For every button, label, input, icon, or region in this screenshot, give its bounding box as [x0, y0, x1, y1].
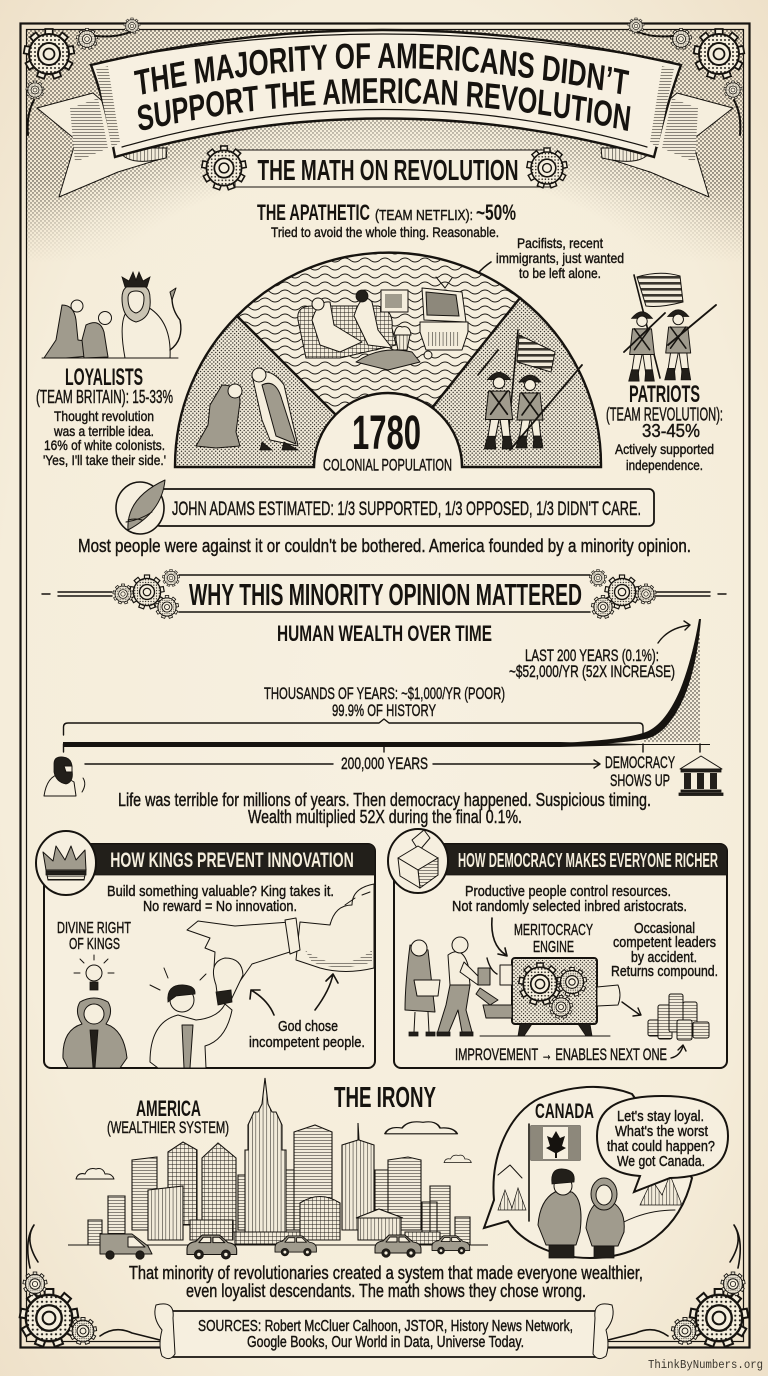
crown badge	[36, 831, 96, 895]
icon: quill	[128, 480, 165, 530]
panel: how democracy makes everyone richer: Returns compound.	[611, 963, 718, 980]
apathetic heading: THE APATHETIC	[257, 200, 370, 225]
halftone vignette	[27, 30, 743, 258]
icon: man in parka	[538, 1169, 581, 1258]
last 200 years label: LAST 200 YEARS (0.1%):	[525, 646, 659, 665]
panel: how kings prevent innovation: DIVINE RIGHT	[57, 920, 131, 937]
speech bubble	[597, 1096, 728, 1192]
panel: how kings prevent innovation: No reward = No innovation.	[143, 898, 297, 915]
speech bubble: What's the worst	[615, 1123, 709, 1140]
thousands of years label: 99.9% OF HISTORY	[332, 701, 436, 720]
patriots text	[606, 381, 723, 473]
thousands of years label	[264, 684, 505, 720]
ballot box badge	[388, 829, 448, 893]
apathetic heading: ~50%	[476, 200, 516, 225]
bracket	[64, 719, 643, 735]
section heading: the math on revolution	[202, 146, 567, 190]
arrows to bulb and king	[250, 974, 338, 1015]
chart: human wealth over time	[63, 619, 710, 752]
lion	[122, 272, 181, 358]
pacifists note with arrow	[466, 235, 624, 289]
illustration: clouds	[76, 1122, 471, 1179]
illustration: america skyline	[68, 1078, 488, 1245]
timing commentary: Life was terrible for millions of years. Then democracy happened. Suspicious timing.	[118, 790, 651, 810]
chart: colonial population semicircle	[175, 253, 601, 474]
canada label: CANADA	[535, 1100, 594, 1123]
icon: distressed scientist	[150, 968, 232, 1068]
icon: small lightbulb	[74, 955, 114, 990]
loyalists text: was a terrible idea.	[53, 423, 154, 439]
loyalists text: LOYALISTS	[65, 364, 143, 391]
last 200 years label: ~$52,000/YR (52X INCREASE)	[509, 662, 675, 681]
shaded area under curve	[640, 619, 700, 742]
kneeling courtiers	[44, 305, 92, 358]
speech bubble: We got Canada.	[617, 1153, 705, 1170]
patriots text: independence.	[626, 457, 703, 473]
timeline arrow: 200,000 years: 200,000 YEARS	[341, 754, 428, 773]
panel: how democracy makes everyone richer: Not randomly selected inbred aristocrats.	[452, 898, 687, 915]
corner gears bottom left	[20, 1225, 160, 1347]
centre label: 1780	[352, 407, 421, 460]
wedge: apathetic	[237, 253, 520, 415]
loyalists text	[36, 364, 173, 468]
icon: large lightbulb	[213, 958, 243, 1005]
sleeping person	[356, 350, 420, 370]
corner gears bottom right	[608, 1225, 748, 1347]
loyalists text: 'Yes, I'll take their side.'	[43, 452, 166, 468]
axis	[63, 742, 710, 747]
timeline arrow: 200,000 years	[85, 754, 600, 773]
apathetic heading: (TEAM NETFLIX):	[375, 207, 473, 224]
title ribbon banner	[36, 28, 734, 198]
wedge: loyalists	[175, 316, 336, 467]
growth curve	[560, 619, 701, 746]
pacifists note with arrow: immigrants, just wanted	[496, 250, 624, 266]
loyalists text: 16% of white colonists.	[44, 437, 165, 453]
pacifists note with arrow: to be left alone.	[519, 265, 601, 281]
panel: how kings prevent innovation: incompetent people.	[249, 1034, 365, 1051]
popcorn	[395, 335, 410, 350]
democracy shows up label: DEMOCRACY	[605, 753, 675, 772]
canada speech circle	[484, 1087, 728, 1258]
title line 2: SUPPORT THE AMERICAN REVOLUTION	[138, 78, 630, 131]
centre label	[314, 393, 462, 474]
pacifists note with arrow: Pacifists, recent	[517, 235, 603, 251]
panel: how kings prevent innovation	[36, 831, 375, 1068]
icon: king's hand taking the bulb	[187, 918, 300, 984]
conclusion text: even loyalist descendants. The math shows they chose wrong.	[186, 1281, 586, 1301]
timing commentary: Wealth multiplied 52X during the final 0.1%.	[248, 807, 522, 827]
panel: how kings prevent innovation: OF KINGS	[69, 936, 120, 953]
icon: greek temple	[679, 756, 723, 796]
icon: meritocracy engine	[480, 958, 620, 1036]
panel: how democracy makes everyone richer: ENGINE	[533, 939, 574, 956]
last 200 years label	[509, 646, 675, 681]
conclusion text	[129, 1263, 643, 1301]
america label: (WEALTHIER SYSTEM)	[107, 1118, 229, 1137]
icon: woman in parka	[586, 1178, 624, 1258]
section heading: why this minority opinion mattered	[42, 570, 726, 618]
centre label: COLONIAL POPULATION	[323, 456, 452, 474]
panel: how kings prevent innovation: Build something valuable? King takes it.	[107, 883, 334, 900]
wedge: patriots	[432, 298, 601, 467]
panel: how democracy makes everyone richer: Occasional	[634, 920, 695, 937]
sources scroll: Google Books, Our World in Data, Universe Today.	[247, 1334, 524, 1351]
icon: loyalists with lion	[42, 272, 181, 358]
loyalists text: (TEAM BRITAIN): 15-33%	[36, 387, 173, 407]
arrow to peak	[658, 621, 690, 643]
callout: john adams estimate	[116, 480, 654, 534]
the irony heading: THE IRONY	[334, 1082, 436, 1114]
patriots text: PATRIOTS	[629, 381, 700, 408]
panel: how kings prevent innovation: KING	[329, 918, 363, 943]
apathetic heading	[257, 200, 516, 225]
patriots text: Actively supported	[615, 441, 714, 457]
illustration: traffic	[100, 1234, 470, 1259]
panel: how democracy makes everyone richer	[388, 829, 727, 1068]
icon: canadian flag	[529, 1124, 580, 1221]
panel: how democracy makes everyone richer: by accident.	[631, 949, 697, 966]
panel: how democracy makes everyone richer: MERITOCRACY	[514, 922, 593, 939]
icon: worried man with hands on head	[63, 998, 127, 1068]
section heading: the math on revolution: THE MATH ON REVOLUTION	[258, 155, 518, 187]
panel: how kings prevent innovation: God chose	[278, 1018, 338, 1035]
sofa and viewers	[298, 306, 396, 358]
corner gears top left	[24, 18, 140, 135]
icon: woman with box	[405, 940, 440, 1036]
arrows around engine	[487, 918, 641, 1016]
panel: how democracy makes everyone richer: Productive people control resources.	[465, 883, 671, 900]
democracy shows up label: SHOWS UP	[610, 771, 670, 790]
america label: AMERICA	[136, 1096, 201, 1121]
televisions	[381, 290, 408, 312]
icon: mountains and trees	[498, 1165, 682, 1230]
loyalists text: Thought revolution	[54, 408, 154, 424]
timing commentary	[118, 790, 651, 827]
title line 1: THE MAJORITY OF AMERICANS DIDN’T	[134, 43, 630, 94]
speech bubble: Let's stay loyal.	[617, 1108, 704, 1125]
speech bubble: that could happen?	[607, 1138, 715, 1155]
conclusion text: That minority of revolutionaries created a system that made everyone wealthier,	[129, 1263, 643, 1283]
thousands of years label: THOUSANDS OF YEARS: ~$1,000/YR (POOR)	[264, 684, 505, 703]
icon: patriots with flag	[624, 273, 716, 381]
sources scroll: SOURCES: Robert McCluer Calhoon, JSTOR, History News Network,	[198, 1318, 573, 1335]
democracy shows up label	[605, 753, 675, 790]
icon: stacks of coins	[648, 994, 709, 1040]
panel: how democracy makes everyone richer: IMPROVEMENT → ENABLES NEXT ONE	[455, 1045, 667, 1064]
patriots text: 33-45%	[642, 421, 700, 441]
chart heading: HUMAN WEALTH OVER TIME	[277, 621, 492, 646]
corner gears top right	[628, 18, 744, 135]
sources scroll	[155, 1304, 613, 1359]
icon: cloud with king's sleeve	[296, 884, 374, 972]
panel: how kings prevent innovation: HOW KINGS PREVENT INNOVATION	[110, 849, 354, 872]
icon: man pushing	[437, 937, 498, 1036]
america label	[107, 1096, 229, 1137]
panel: how democracy makes everyone richer: competent leaders	[613, 934, 716, 951]
apathetic description: Tried to avoid the whole thing. Reasonable.	[271, 224, 499, 240]
icon: caveman	[44, 757, 85, 796]
